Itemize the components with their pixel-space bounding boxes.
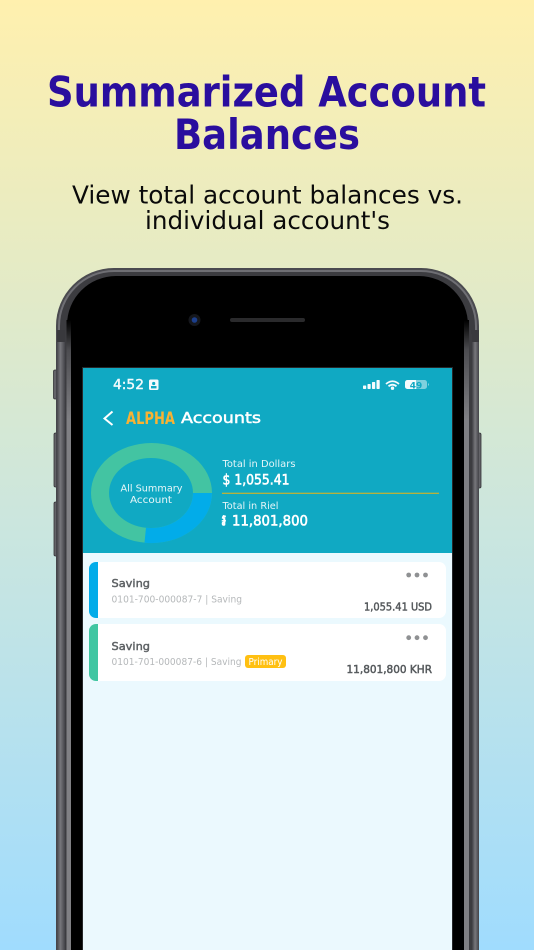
app header panel <box>83 368 452 553</box>
subtitle <box>72 180 463 235</box>
subtitle: individual account's <box>145 206 390 235</box>
speaker <box>230 318 305 322</box>
total in dollars: $ 1,055.41 <box>222 472 290 488</box>
status bar time <box>113 377 158 393</box>
phone mockup <box>54 268 481 950</box>
total in riel: ៛ <box>222 512 227 530</box>
donut label: Account <box>130 495 172 506</box>
total in riel: Total in Riel <box>222 501 278 512</box>
icon: wifi <box>386 381 399 389</box>
screen title: Accounts <box>181 409 261 427</box>
total in riel <box>222 501 308 530</box>
icon: battery: 49 <box>410 381 422 391</box>
account card: KHR: 0101-701-000087-6 | Saving <box>112 657 242 668</box>
account card: USD: 0101-700-000087-7 | Saving <box>112 594 242 606</box>
icon: signal <box>363 380 380 389</box>
account card: KHR <box>89 624 446 681</box>
title: Summarized Account <box>47 68 486 116</box>
account card: KHR: Saving <box>112 640 150 653</box>
total in riel: 11,801,800 <box>232 514 308 530</box>
logo: alpha: ALPHA <box>126 409 175 428</box>
icon: back chevron <box>104 412 112 425</box>
front camera <box>188 314 200 326</box>
divider <box>222 493 439 494</box>
icon: battery <box>405 380 429 391</box>
total in dollars <box>222 459 296 488</box>
account card: KHR: 11,801,800 KHR <box>346 663 432 676</box>
title: Balances <box>174 110 360 159</box>
side buttons <box>54 370 481 556</box>
app screen <box>82 367 453 950</box>
title <box>47 68 486 159</box>
phone frame <box>56 268 479 950</box>
account card: USD: Saving <box>112 577 150 590</box>
primary badge: Primary <box>248 657 283 668</box>
total in dollars: Total in Dollars <box>222 459 296 470</box>
subtitle: View total account balances vs. <box>72 180 463 210</box>
donut label: All Summary <box>120 484 183 494</box>
account card: USD: 1,055.41 USD <box>364 600 432 614</box>
status bar time: 4:52 <box>113 377 144 393</box>
account card: USD <box>89 562 446 618</box>
donut segment: dollars <box>144 493 212 543</box>
donut chart <box>91 443 212 543</box>
donut label <box>120 484 183 506</box>
